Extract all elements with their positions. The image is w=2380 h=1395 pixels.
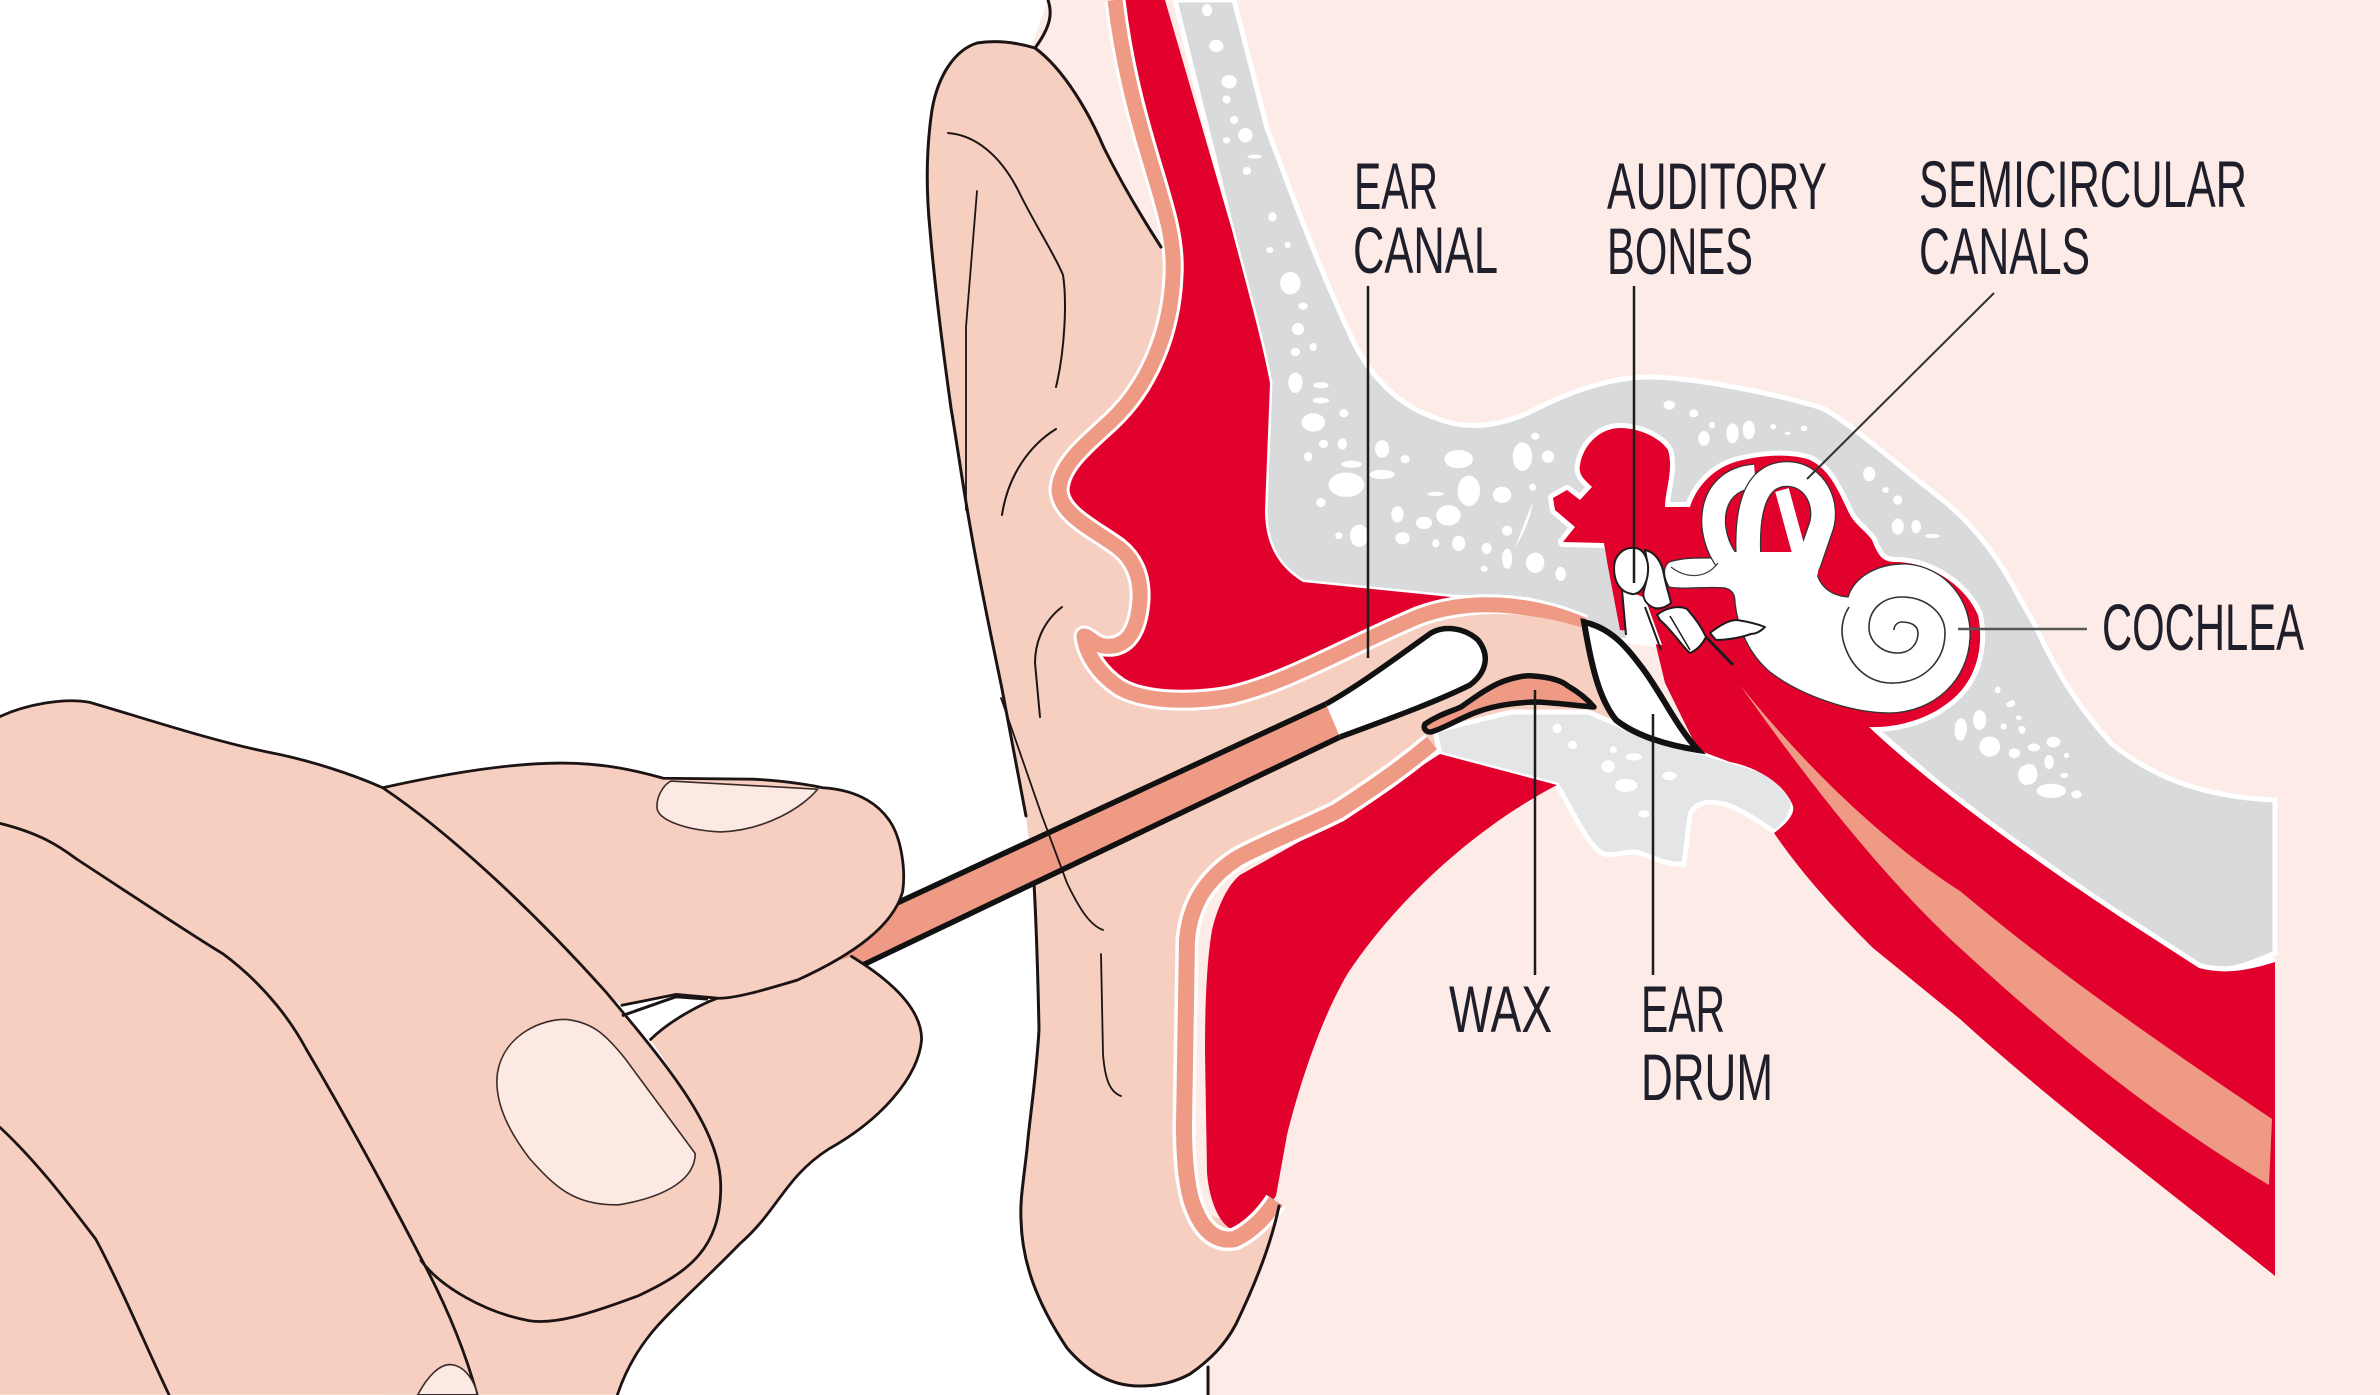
stapes footplate arc	[1671, 563, 1718, 576]
label: ear canal: CANAL	[1353, 213, 1498, 287]
label: semicircular canals: CANALS	[1919, 214, 2090, 288]
label: ear drum: EAR	[1641, 972, 1725, 1046]
semicircular canal: right arch	[1748, 474, 1823, 565]
cochlea spiral	[1842, 597, 1945, 683]
fingernail: index	[657, 781, 818, 832]
ear drum	[1584, 622, 1698, 750]
bone pores: lower right	[1955, 702, 2082, 798]
label: auditory bones	[1607, 149, 1827, 583]
head background	[1030, 0, 2380, 1395]
fingernail: thumb	[497, 1019, 695, 1205]
middle ear cavity and auditory nerve	[1553, 428, 2275, 1276]
index finger	[383, 763, 904, 1005]
hand outlines	[0, 701, 922, 1395]
ear wax	[1424, 676, 1594, 732]
labyrinth body and cochlea	[1664, 558, 1970, 713]
label: auditory bones: AUDITORY	[1607, 149, 1827, 223]
ear detail lines	[927, 0, 1279, 1395]
thumb and palm	[0, 701, 721, 1395]
bone pores: middle ear region	[1664, 400, 2034, 785]
label: ear drum	[1641, 714, 1773, 1114]
label: semicircular canals	[1807, 147, 2247, 479]
red tissue: upper	[1059, 0, 1451, 700]
auditory bones	[1614, 548, 1765, 665]
nerve salmon stripe	[1740, 685, 2272, 1185]
lower bone	[1435, 712, 1793, 864]
label: ear canal: EAR	[1354, 149, 1438, 223]
label: ear drum: DRUM	[1641, 1040, 1773, 1114]
cotton swab stick	[800, 704, 1340, 995]
lower skin lining band	[1184, 743, 1432, 1240]
upper skin lining band	[1059, 0, 1584, 700]
ring finger	[383, 956, 922, 1395]
label: auditory bones: BONES	[1607, 214, 1753, 288]
lower bone pores	[1553, 724, 1677, 818]
bone pores: upper left	[1202, 4, 1566, 581]
outer ear skin	[927, 42, 1600, 1386]
semicircular canal: left arch	[1714, 476, 1755, 562]
inner ear cavity halo	[1553, 428, 2275, 971]
bone: upper temporal bone	[1175, 0, 2275, 970]
stick glimpse between fingers	[622, 997, 708, 1016]
hand holding swab	[0, 701, 922, 1395]
canal skin near ear drum	[1420, 614, 1630, 745]
label: wax: WAX	[1449, 972, 1552, 1046]
label: ear canal	[1353, 149, 1498, 658]
fingernail: lower finger	[418, 1365, 477, 1395]
red tissue: lower	[1205, 754, 1557, 1229]
labyrinth white join	[1716, 552, 1822, 582]
cotton swab head	[1326, 629, 1485, 737]
